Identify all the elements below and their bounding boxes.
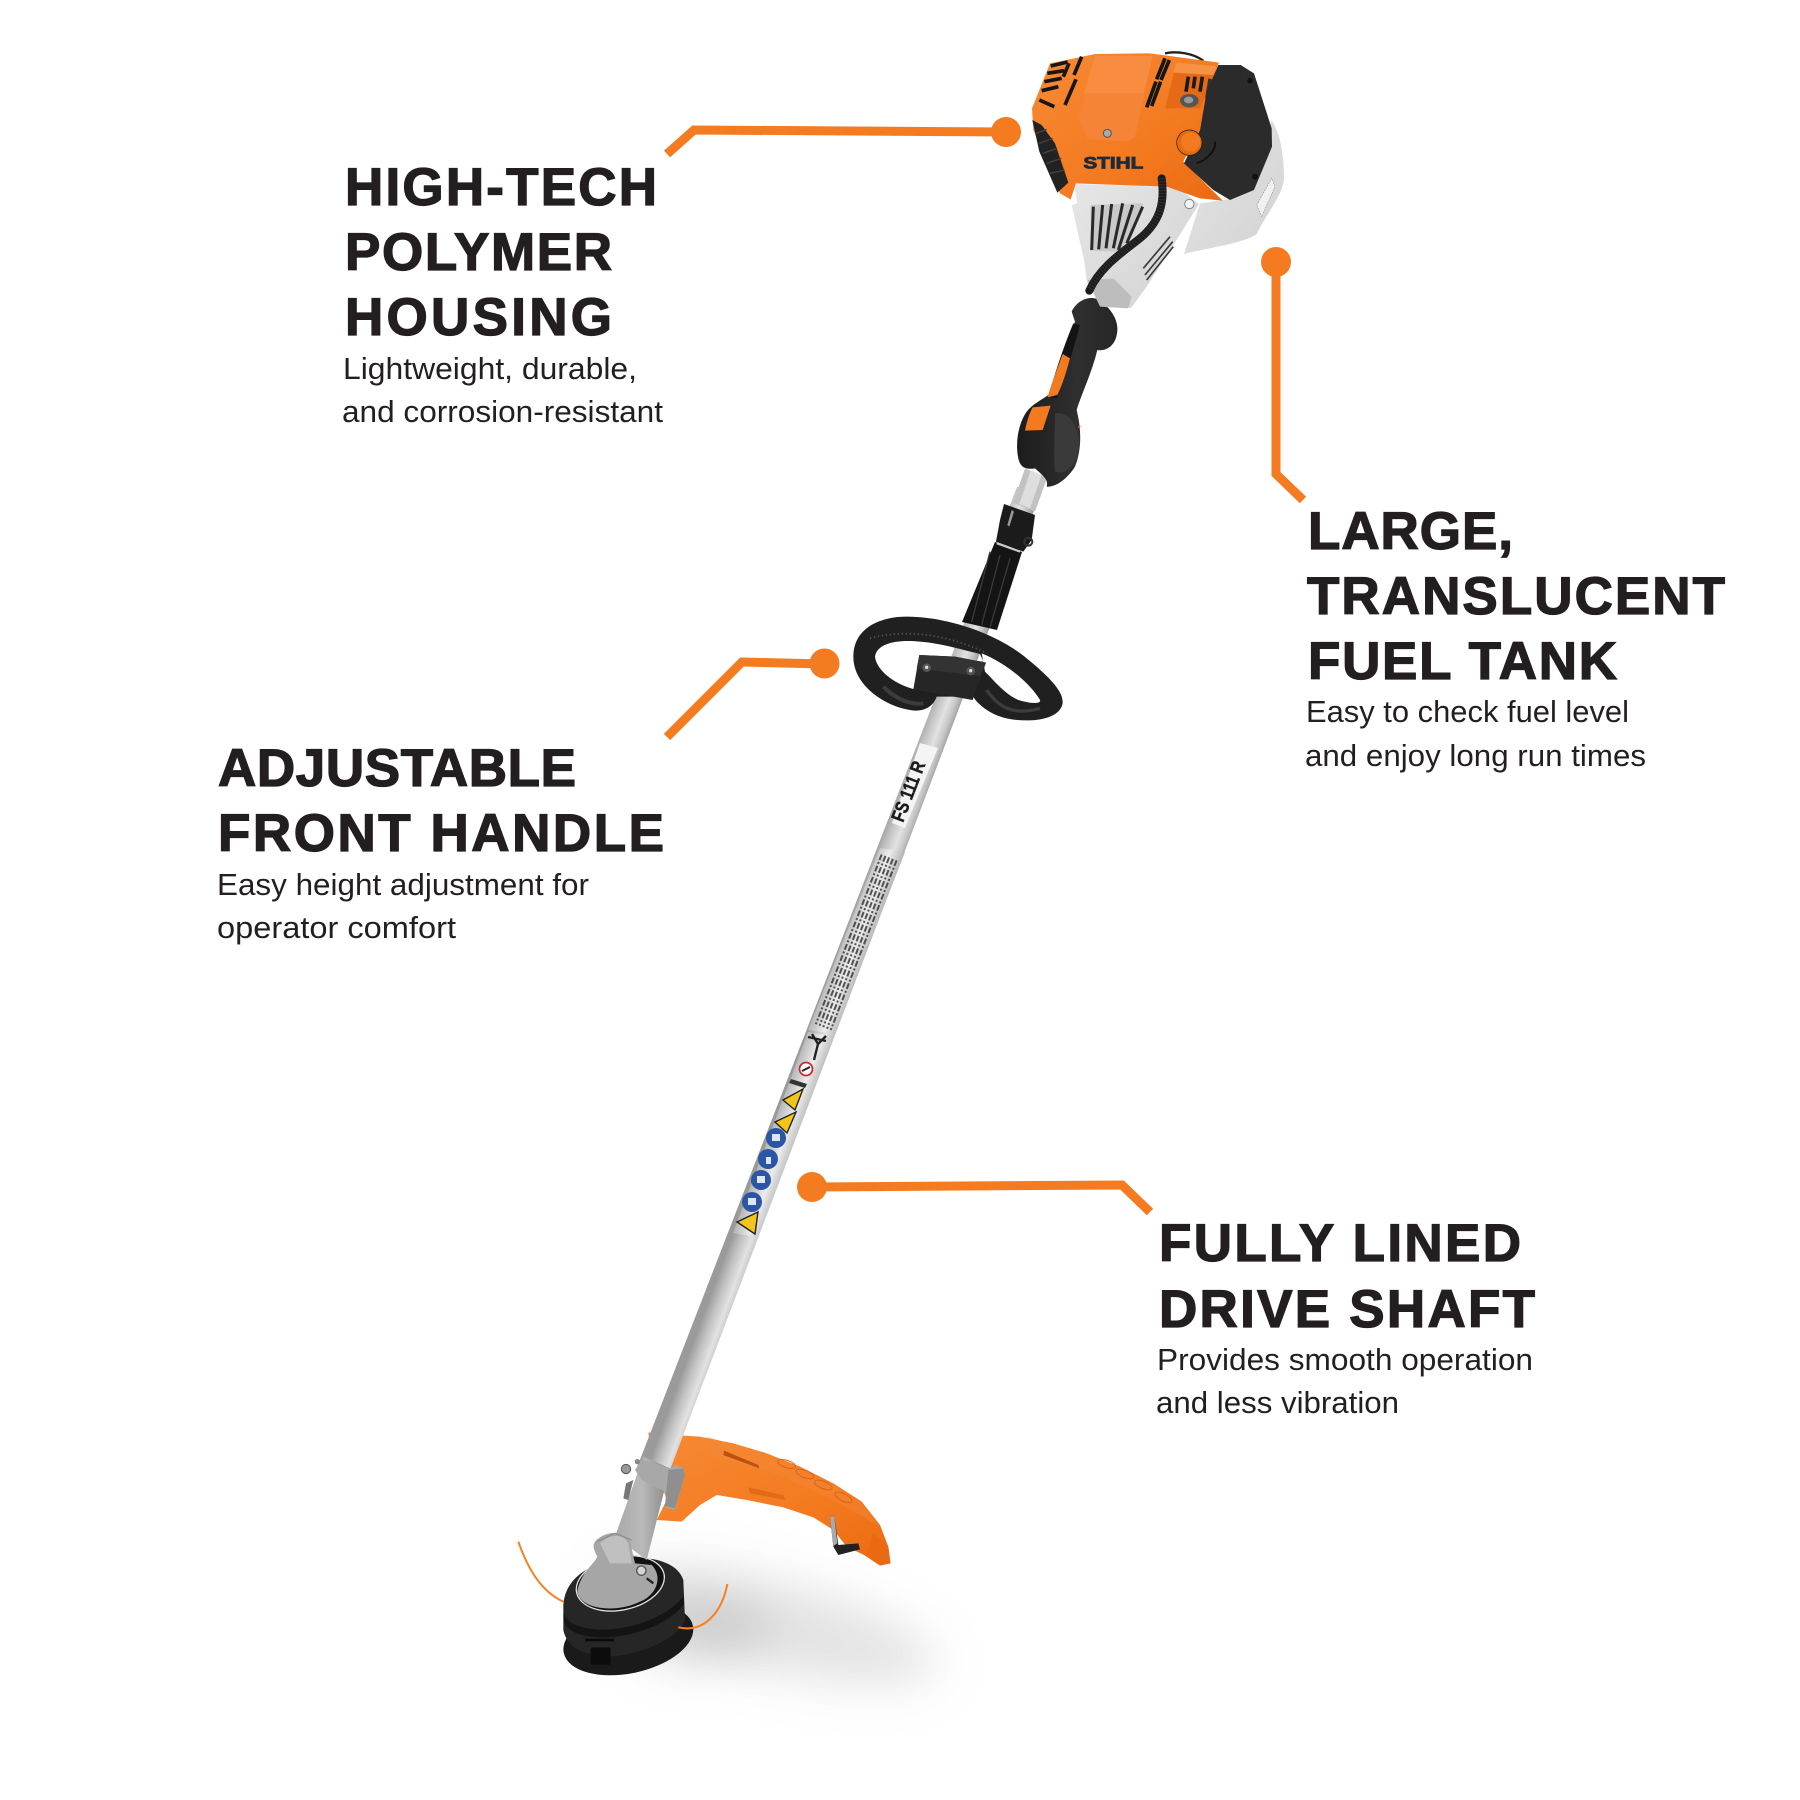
description [1305, 694, 1646, 773]
description: Lightweight, durable, [343, 351, 637, 386]
callout: fully lined drive shaft [797, 1172, 1535, 1420]
leader line [667, 648, 840, 737]
air filter black cover [1184, 65, 1272, 200]
description: and corrosion-resistant [342, 394, 663, 429]
engine unit [1032, 52, 1284, 308]
front loop handle [853, 617, 1063, 720]
description: operator comfort [217, 910, 456, 945]
heading: POLYMER [345, 223, 612, 282]
heading: DRIVE SHAFT [1159, 1280, 1535, 1339]
description: and enjoy long run times [1305, 738, 1646, 773]
heading [1159, 1214, 1535, 1339]
heading: LARGE, [1308, 502, 1513, 561]
handle clamp [913, 655, 986, 700]
callout: large translucent fuel tank [1261, 247, 1725, 773]
model label: FS 111 R: FS 111 R [888, 758, 930, 825]
description: Easy height adjustment for [217, 867, 589, 902]
heading: FRONT HANDLE [218, 804, 664, 863]
leader line [667, 117, 1021, 154]
callout: high-tech polymer housing [342, 117, 1021, 429]
description [1156, 1342, 1533, 1420]
heading: ADJUSTABLE [218, 739, 576, 798]
description: Provides smooth operation [1157, 1342, 1533, 1377]
product: string trimmer [518, 52, 1284, 1709]
STIHL logo: STIHL [1083, 154, 1143, 173]
heading [1307, 502, 1725, 691]
heading [218, 739, 664, 863]
leader line [1261, 247, 1303, 500]
leader line [797, 1172, 1150, 1212]
orange safety button [1025, 406, 1051, 431]
prohibition sign [800, 1062, 812, 1076]
carb window [1165, 63, 1217, 108]
black shaft sleeve with ribs [962, 542, 1022, 630]
orange choke knob [1177, 130, 1202, 155]
trimmer guard [648, 1432, 891, 1566]
upper silver tube and coupling [996, 468, 1047, 552]
top cover panel [1079, 56, 1153, 142]
tube bracket [635, 1459, 685, 1510]
cable top [1165, 52, 1203, 61]
heading: HOUSING [345, 288, 612, 347]
throttle trigger [1048, 354, 1070, 397]
fuel tank [1184, 120, 1284, 254]
left black vent [1032, 120, 1068, 193]
neck [1087, 278, 1132, 308]
description [342, 351, 663, 429]
callout: adjustable front handle [217, 648, 840, 945]
heading: HIGH-TECH [345, 158, 657, 217]
starter cover grey body [1072, 184, 1199, 308]
safety icon decal [733, 1032, 834, 1237]
warning triangles [737, 1089, 803, 1234]
trimmer line [518, 1542, 727, 1628]
heading: FULLY LINED [1159, 1214, 1521, 1273]
cutting head spool [557, 1548, 700, 1686]
description: Easy to check fuel level [1306, 694, 1629, 729]
heading: FUEL TANK [1308, 632, 1617, 691]
housing vents [1039, 57, 1169, 107]
fuel line cable [1089, 178, 1163, 291]
rear grip with controls [1017, 298, 1117, 487]
fine-print decal [808, 848, 905, 1034]
description [217, 867, 589, 945]
shaft tube [636, 487, 1043, 1470]
blue instruction circles [742, 1128, 786, 1212]
slot in spool [585, 1639, 614, 1641]
heading: TRANSLUCENT [1307, 567, 1725, 626]
description: and less vibration [1156, 1385, 1399, 1420]
heading [345, 158, 657, 347]
gear dome [577, 1533, 658, 1608]
black pictograms [789, 1079, 807, 1088]
ground shadow [594, 1541, 946, 1709]
orange housing [1032, 53, 1223, 201]
gearhead and bracket [577, 1457, 685, 1608]
